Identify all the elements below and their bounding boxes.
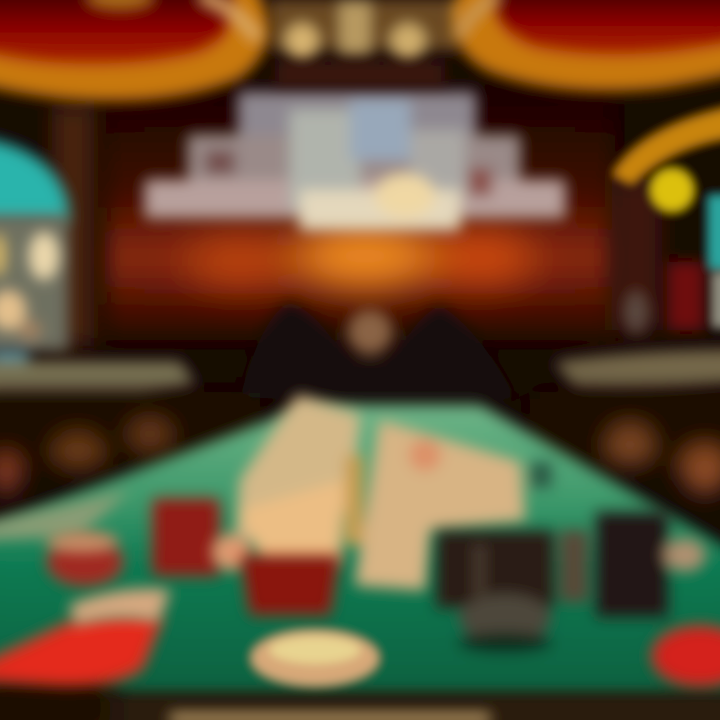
icon: yellow lamp <box>650 168 694 212</box>
tan rim highlight <box>200 0 258 40</box>
machine right <box>708 195 720 270</box>
panel: canopy top left <box>0 0 268 100</box>
panel: giant playing cards display <box>145 92 565 230</box>
dark bottom-left corner <box>0 676 110 720</box>
panel: audience band with orange spots <box>0 392 720 494</box>
icon: red chip stack centre <box>152 498 220 576</box>
machine reels <box>0 232 59 380</box>
panel: slot machine left <box>0 138 68 380</box>
bottom table edge <box>0 694 720 720</box>
icon: orange arc <box>612 105 720 185</box>
chip edge marks <box>475 545 484 595</box>
icon: peach wedge <box>212 534 252 570</box>
panel: green table felt <box>0 405 720 695</box>
panel: seated silhouettes <box>240 302 515 398</box>
icon: red chip left <box>47 538 123 586</box>
panel: red chips and cards <box>0 498 720 686</box>
icon: red chip stack lower <box>240 555 340 615</box>
strip: grey-green left edge of felt <box>0 490 130 540</box>
panel: dark chip stacks <box>436 512 705 652</box>
glow: orange stage lights <box>185 224 535 288</box>
icon: red card stack <box>0 616 162 685</box>
panel: right arc and lamp <box>612 105 720 334</box>
panel: canopy top right <box>454 0 720 91</box>
icon: teal dome <box>0 138 68 222</box>
band below top lights <box>275 62 445 86</box>
panel: wooden pillars <box>52 105 662 345</box>
panel: playing cards on table <box>235 395 552 590</box>
tan rim highlight <box>458 0 500 38</box>
icon: cream chip <box>251 630 379 686</box>
panel: ledge left <box>0 362 195 395</box>
panel: stage backdrop <box>105 85 615 340</box>
icon: red chip right <box>652 626 720 686</box>
panel: ledge right <box>555 350 720 389</box>
panel: top centre lights <box>199 0 506 60</box>
machine body <box>0 215 68 350</box>
